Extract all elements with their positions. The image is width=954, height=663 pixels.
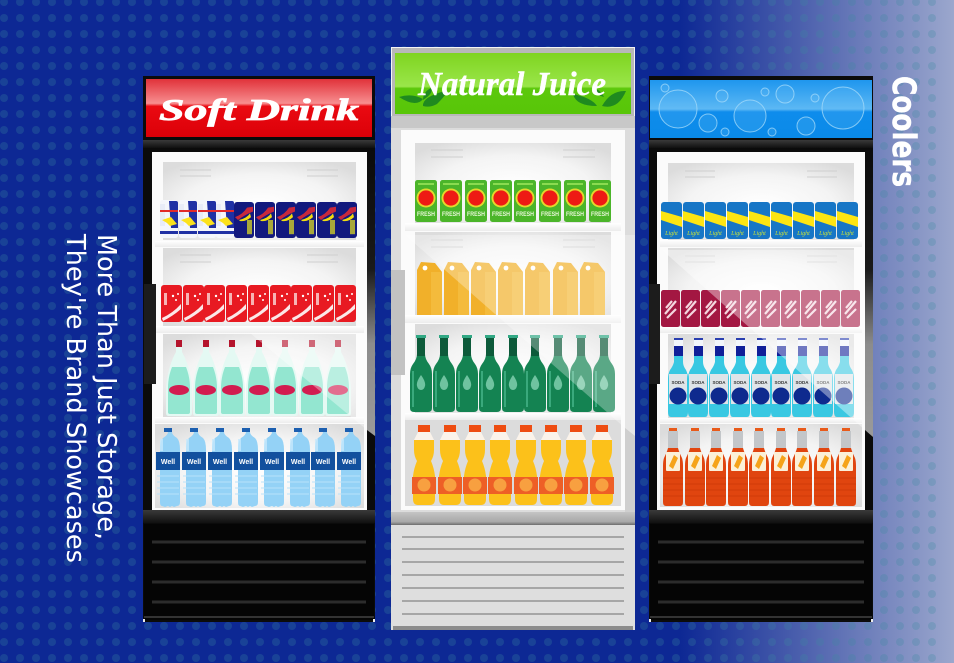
row: juice cartons	[417, 262, 605, 315]
interior	[657, 152, 865, 510]
door handle	[649, 284, 660, 384]
lower vent panel	[391, 525, 635, 630]
title: Coolers: Coolers	[885, 76, 923, 187]
sign: Natural Juice: Natural Juice	[417, 66, 606, 103]
interior	[401, 130, 625, 510]
row: blue and yellow cans	[661, 202, 858, 239]
row: red cans	[161, 285, 356, 322]
row: energy and cola cans	[160, 200, 357, 238]
sign: Soft Drink: Soft Drink	[159, 92, 360, 127]
sign: Soft Drink	[146, 79, 372, 137]
row: orange soda bottles	[663, 428, 856, 506]
vertical tagline: More Than Just Storage,	[91, 234, 121, 540]
lower vent panel	[649, 524, 873, 622]
row: blue soda bottles	[668, 338, 854, 417]
row: green bottles	[410, 335, 615, 412]
sign: Natural Juice	[392, 48, 634, 116]
cooler: soft drink	[143, 76, 375, 622]
lower vent panel	[143, 524, 375, 622]
row: purple cans	[661, 290, 860, 327]
row: mint glass bottles	[166, 340, 351, 416]
row: water bottles	[156, 428, 361, 507]
interior	[152, 152, 367, 510]
door handle	[144, 284, 156, 384]
vertical tagline second line: They're Brand Showcases	[60, 233, 90, 563]
sign: bubbles	[650, 80, 872, 138]
door handle	[391, 270, 405, 375]
cooler: natural juice	[391, 47, 635, 630]
row: orange juice bottles	[412, 425, 614, 505]
cooler: blue bubbles	[649, 76, 873, 622]
row: apple juice cans	[415, 180, 611, 222]
